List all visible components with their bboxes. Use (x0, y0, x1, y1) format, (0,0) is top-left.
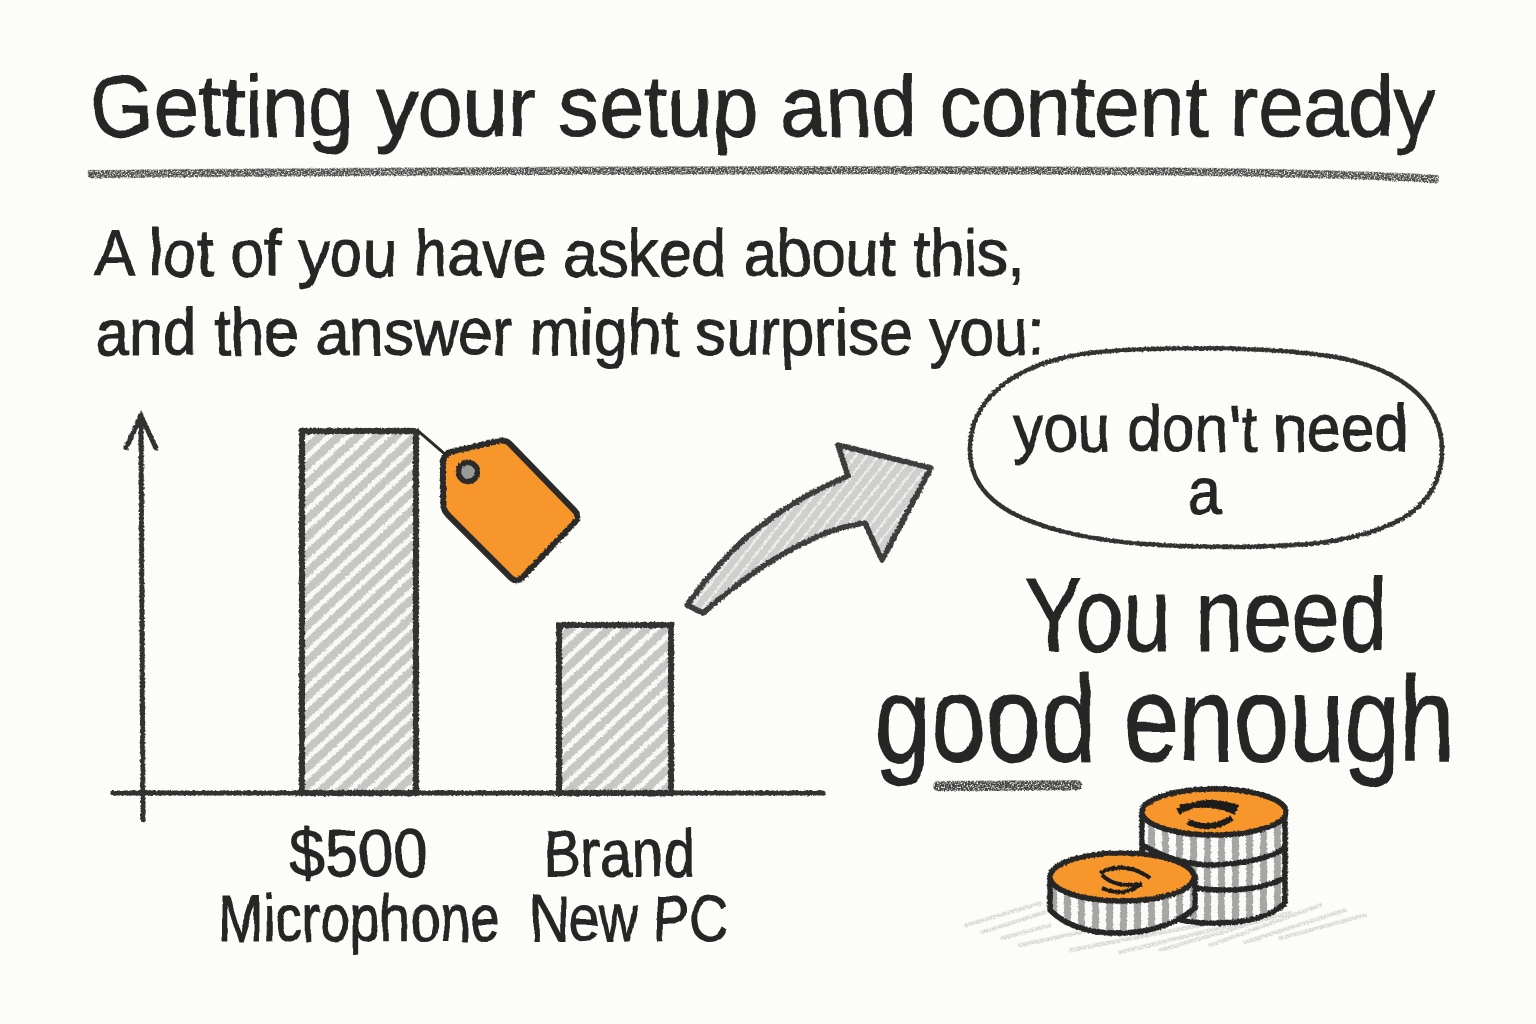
bar: brand new PC (559, 625, 671, 793)
icon: price tag (417, 430, 578, 580)
bar labels: Brand (543, 816, 695, 890)
bar labels: Microphone (218, 881, 500, 955)
coin stack: short (1050, 853, 1195, 933)
ground shadow (966, 903, 1365, 952)
speech bubble (970, 348, 1442, 547)
bubble text: a (1187, 454, 1222, 528)
chart axes (113, 416, 823, 820)
bar chart (113, 416, 823, 955)
bar labels (218, 816, 728, 955)
bar labels: New PC (530, 881, 728, 955)
headline: you need good enough (875, 558, 1455, 787)
bubble text (1013, 391, 1408, 528)
arrow (687, 445, 931, 613)
intro text: and the answer might surprise you: (95, 295, 1045, 369)
title underline (88, 170, 1438, 179)
bar labels: $500 (290, 816, 428, 890)
title: Getting your setup and content ready (90, 59, 1435, 155)
bubble outline (970, 348, 1442, 547)
icon: coin stacks (966, 789, 1365, 952)
bubble text: you don't need (1013, 391, 1408, 465)
underline: good (938, 785, 1077, 786)
intro text (95, 216, 1045, 369)
coin stack: tall (1142, 789, 1286, 923)
headline: you need good enough: You need (1025, 558, 1388, 674)
intro text: A lot of you have asked about this, (95, 216, 1025, 290)
bar: $500 microphone (302, 431, 416, 793)
